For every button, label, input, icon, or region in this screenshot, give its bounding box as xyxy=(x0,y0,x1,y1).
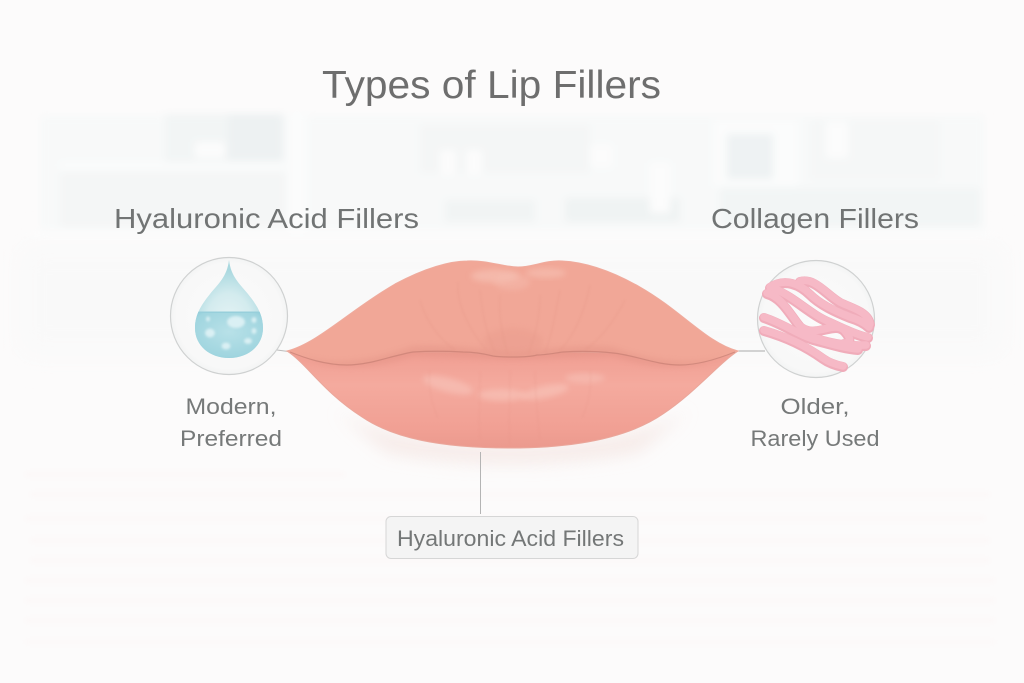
faint horizontal background bands xyxy=(25,472,995,644)
illustration: lips xyxy=(287,261,738,464)
leader line: right lip corner to collagen xyxy=(733,350,765,352)
upper lip highlight right xyxy=(526,268,566,278)
leader line: lips to bottom label xyxy=(480,452,482,514)
label box: hyaluronic acid fillers xyxy=(386,516,638,558)
leader line: left lip corner to droplet xyxy=(277,350,292,352)
lips drop shadow xyxy=(335,410,690,464)
upper lip lower shading xyxy=(300,346,725,367)
label box: hyaluronic acid fillers: Hyaluronic Acid Fillers xyxy=(397,526,624,551)
upper lip wrinkles xyxy=(420,282,625,355)
caption: modern, preferred: Modern, xyxy=(186,394,276,419)
upper lip highlight xyxy=(471,270,519,282)
heading: hyaluronic acid fillers: Hyaluronic Acid Fillers xyxy=(114,203,419,234)
icon: collagen fibers in circle xyxy=(758,260,874,378)
lower lip highlight left xyxy=(421,372,475,398)
upper lip xyxy=(287,261,738,365)
title: Types of Lip Fillers xyxy=(322,64,661,107)
heading: collagen fillers: Collagen Fillers xyxy=(711,203,919,234)
infographic canvas xyxy=(116,70,978,559)
caption: older, rarely used: Older, xyxy=(780,394,850,419)
soft lower backdrop haze xyxy=(20,245,1004,355)
lower lip highlight center right xyxy=(520,381,570,403)
upper center highlight xyxy=(494,274,530,290)
lower lip highlight center xyxy=(478,389,526,401)
blurred clinic shelves backdrop xyxy=(30,112,994,237)
lower lip highlight right xyxy=(565,373,605,383)
icon: water droplet in circle xyxy=(170,258,288,374)
lower lip wrinkles xyxy=(429,370,591,445)
caption: older, rarely used: Rarely Used xyxy=(750,426,880,451)
mouth line xyxy=(290,351,735,365)
caption: modern, preferred: Preferred xyxy=(180,426,282,451)
philtrum shading xyxy=(483,328,543,356)
lower lip xyxy=(287,351,738,448)
